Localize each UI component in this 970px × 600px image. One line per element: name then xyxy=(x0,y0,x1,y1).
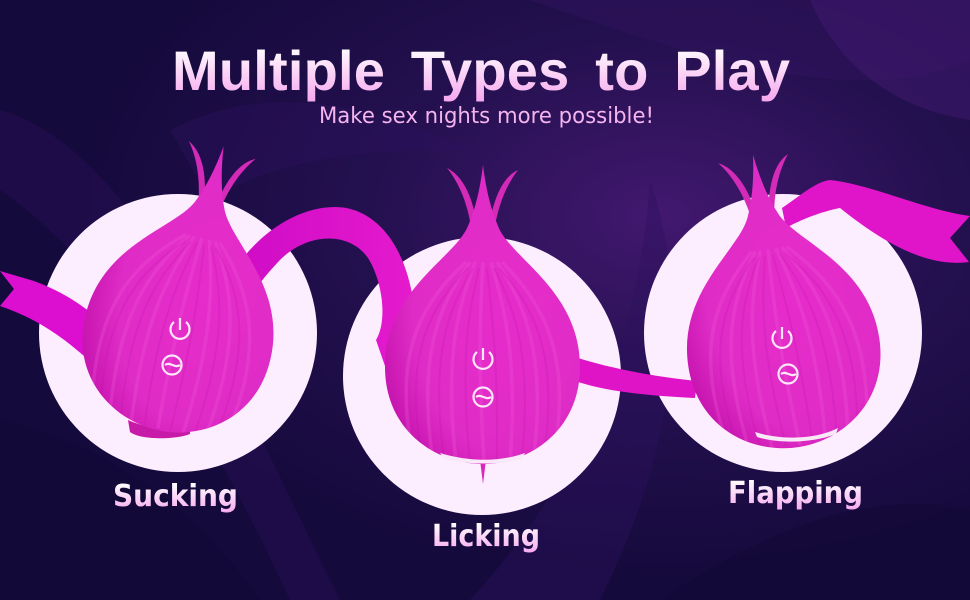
product: licking xyxy=(385,165,580,484)
product: flapping xyxy=(657,140,894,462)
white circle: licking xyxy=(343,237,621,515)
ribbon: between second and third product xyxy=(578,358,697,398)
label: sucking: Sucking xyxy=(113,479,238,514)
product: sucking xyxy=(64,124,316,452)
white circle: sucking xyxy=(39,194,317,472)
icon: power button xyxy=(474,348,493,369)
icon: mode button xyxy=(778,364,798,384)
ribbon: between first and second product xyxy=(240,207,413,366)
title: Multiple Types to Play xyxy=(172,39,790,102)
icon: mode button xyxy=(162,356,182,374)
icon: power button xyxy=(170,318,190,339)
ribbon: right tail xyxy=(782,180,970,263)
icon: mode button xyxy=(474,388,492,406)
subtitle: Make sex nights more possible! xyxy=(319,104,654,129)
icon: power button xyxy=(773,327,792,348)
label: licking: Licking xyxy=(432,519,540,554)
white circle: flapping xyxy=(644,194,922,472)
label: flapping: Flapping xyxy=(728,476,863,511)
ribbon: left tail xyxy=(0,271,90,356)
